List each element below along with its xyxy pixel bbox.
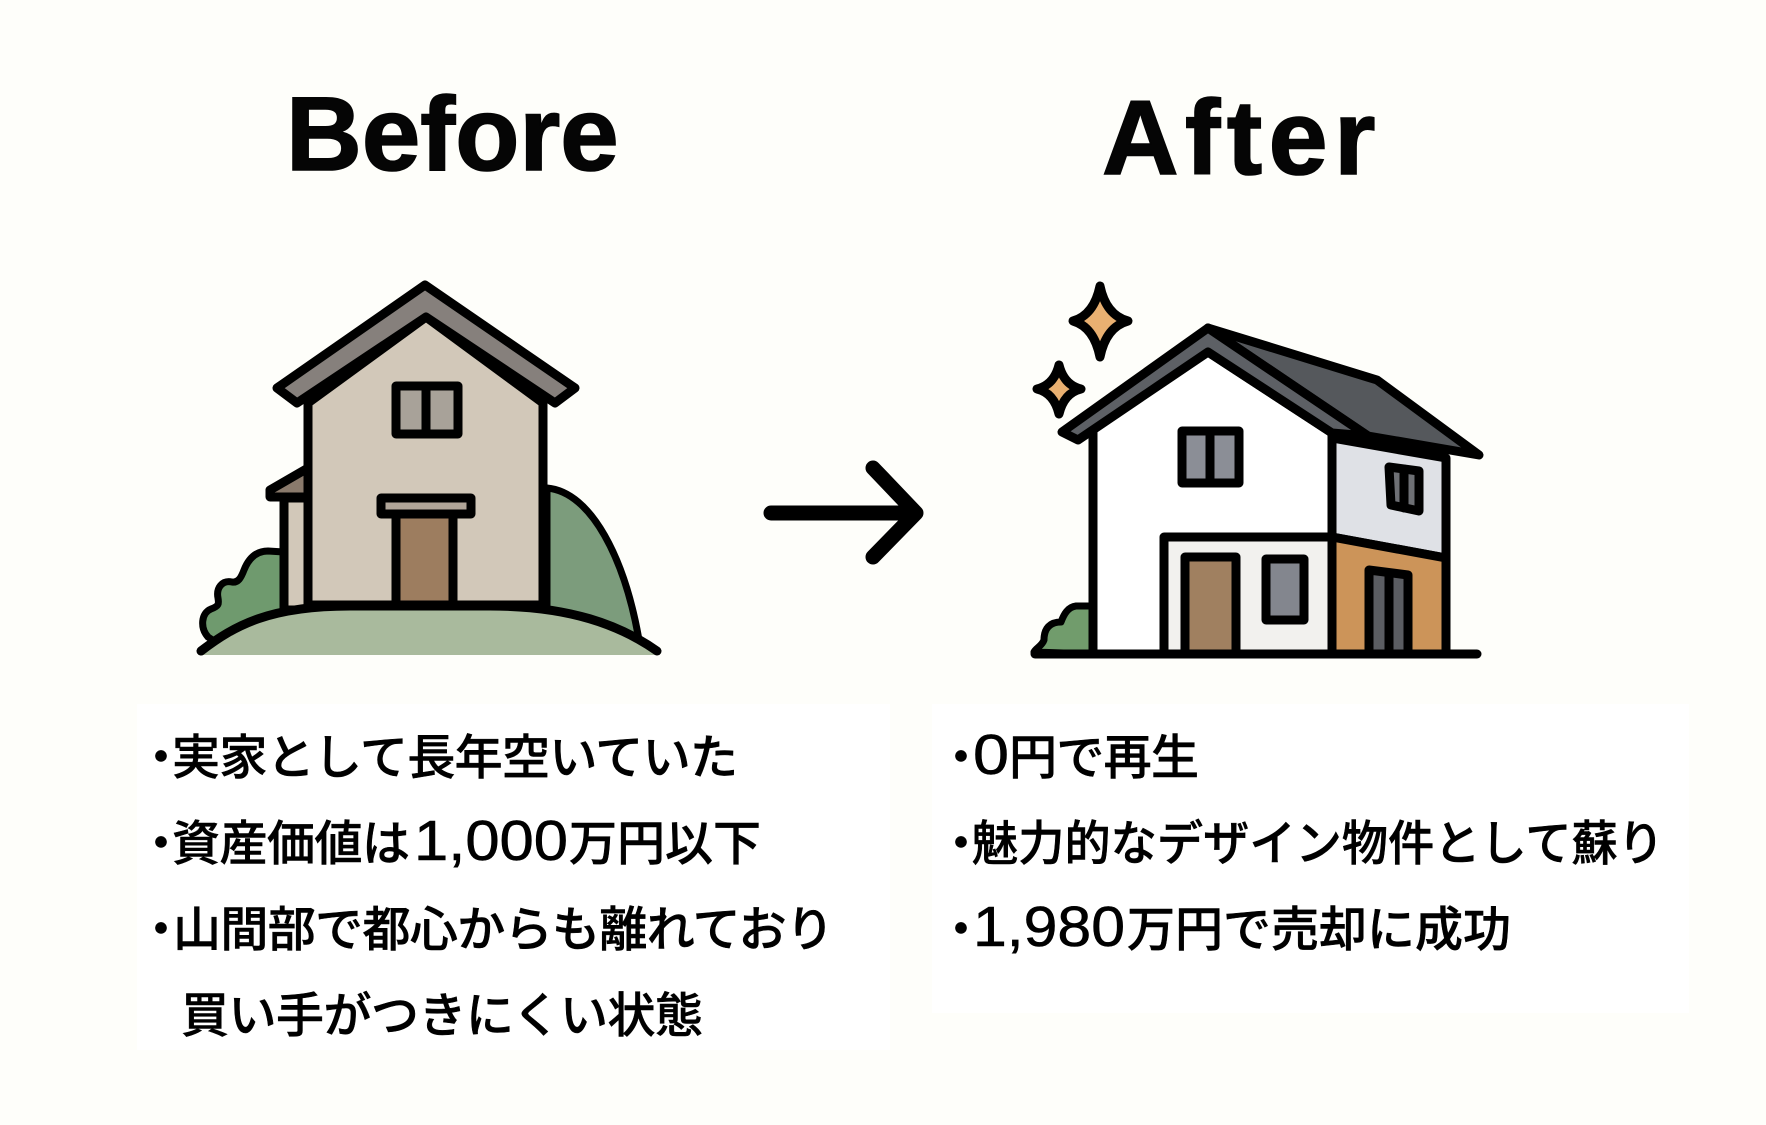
- before line 2: [137, 809, 761, 873]
- after line 1: 円で再生: [1009, 732, 1199, 785]
- before line 1: ・: [137, 732, 185, 785]
- heading: Before: Before: [286, 76, 619, 193]
- after line 1: ・: [937, 732, 985, 785]
- side window: [1389, 467, 1419, 511]
- before line 2: ・: [137, 818, 185, 871]
- arrow: [771, 468, 916, 557]
- panel: before text: [137, 704, 890, 1050]
- before line 3: 山間部で都心からも離れており: [173, 904, 834, 957]
- after line 3: ・: [937, 904, 985, 957]
- bush: [203, 551, 284, 645]
- door: [396, 514, 453, 605]
- annex wall: [284, 498, 308, 610]
- after line 3: 1,980: [973, 895, 1125, 959]
- after line 3: 万円で売却に成功: [1127, 904, 1511, 957]
- before line 2: 万円以下: [569, 818, 761, 871]
- before line 2: 1,000: [414, 809, 568, 873]
- side roof: [1208, 328, 1479, 455]
- before line 2: 資産価値は: [172, 818, 410, 871]
- after line 2: ・: [937, 818, 985, 871]
- panel: after text: [932, 704, 1689, 1013]
- after line 3: [937, 895, 1511, 959]
- gable roof: [1062, 328, 1368, 440]
- hill behind house: [547, 488, 639, 640]
- right wing upper wall: [1332, 438, 1446, 558]
- bush: [1034, 606, 1093, 654]
- heading: After: After: [1102, 79, 1382, 197]
- porch: [1164, 537, 1332, 654]
- right wing lower wall: [1332, 537, 1446, 654]
- before line 3: ・: [137, 904, 185, 957]
- sliding door: [1369, 570, 1408, 654]
- door canopy: [381, 498, 471, 514]
- porch window: [1266, 559, 1304, 620]
- main roof: [277, 285, 575, 403]
- icon: renovated house after: [1034, 286, 1479, 654]
- annex roof: [270, 468, 308, 497]
- icon: old house before renovation: [198, 285, 660, 655]
- before line 4: 買い手がつきにくい状態: [181, 990, 703, 1043]
- main white wall: [1093, 352, 1332, 654]
- after line 1: [937, 723, 1199, 787]
- before line 1: 実家として長年空いていた: [172, 732, 738, 785]
- after line 1: 0: [973, 723, 1009, 787]
- porch door: [1185, 557, 1236, 654]
- upper window: [1182, 431, 1239, 483]
- ground line: [1035, 650, 1477, 658]
- ground mound: [198, 605, 660, 655]
- after line 2: 魅力的なデザイン物件として蘇り: [972, 818, 1664, 871]
- sparkle small: [1037, 365, 1081, 414]
- main wall: [308, 317, 543, 605]
- upper window: [396, 386, 458, 434]
- sparkle large: [1073, 286, 1128, 357]
